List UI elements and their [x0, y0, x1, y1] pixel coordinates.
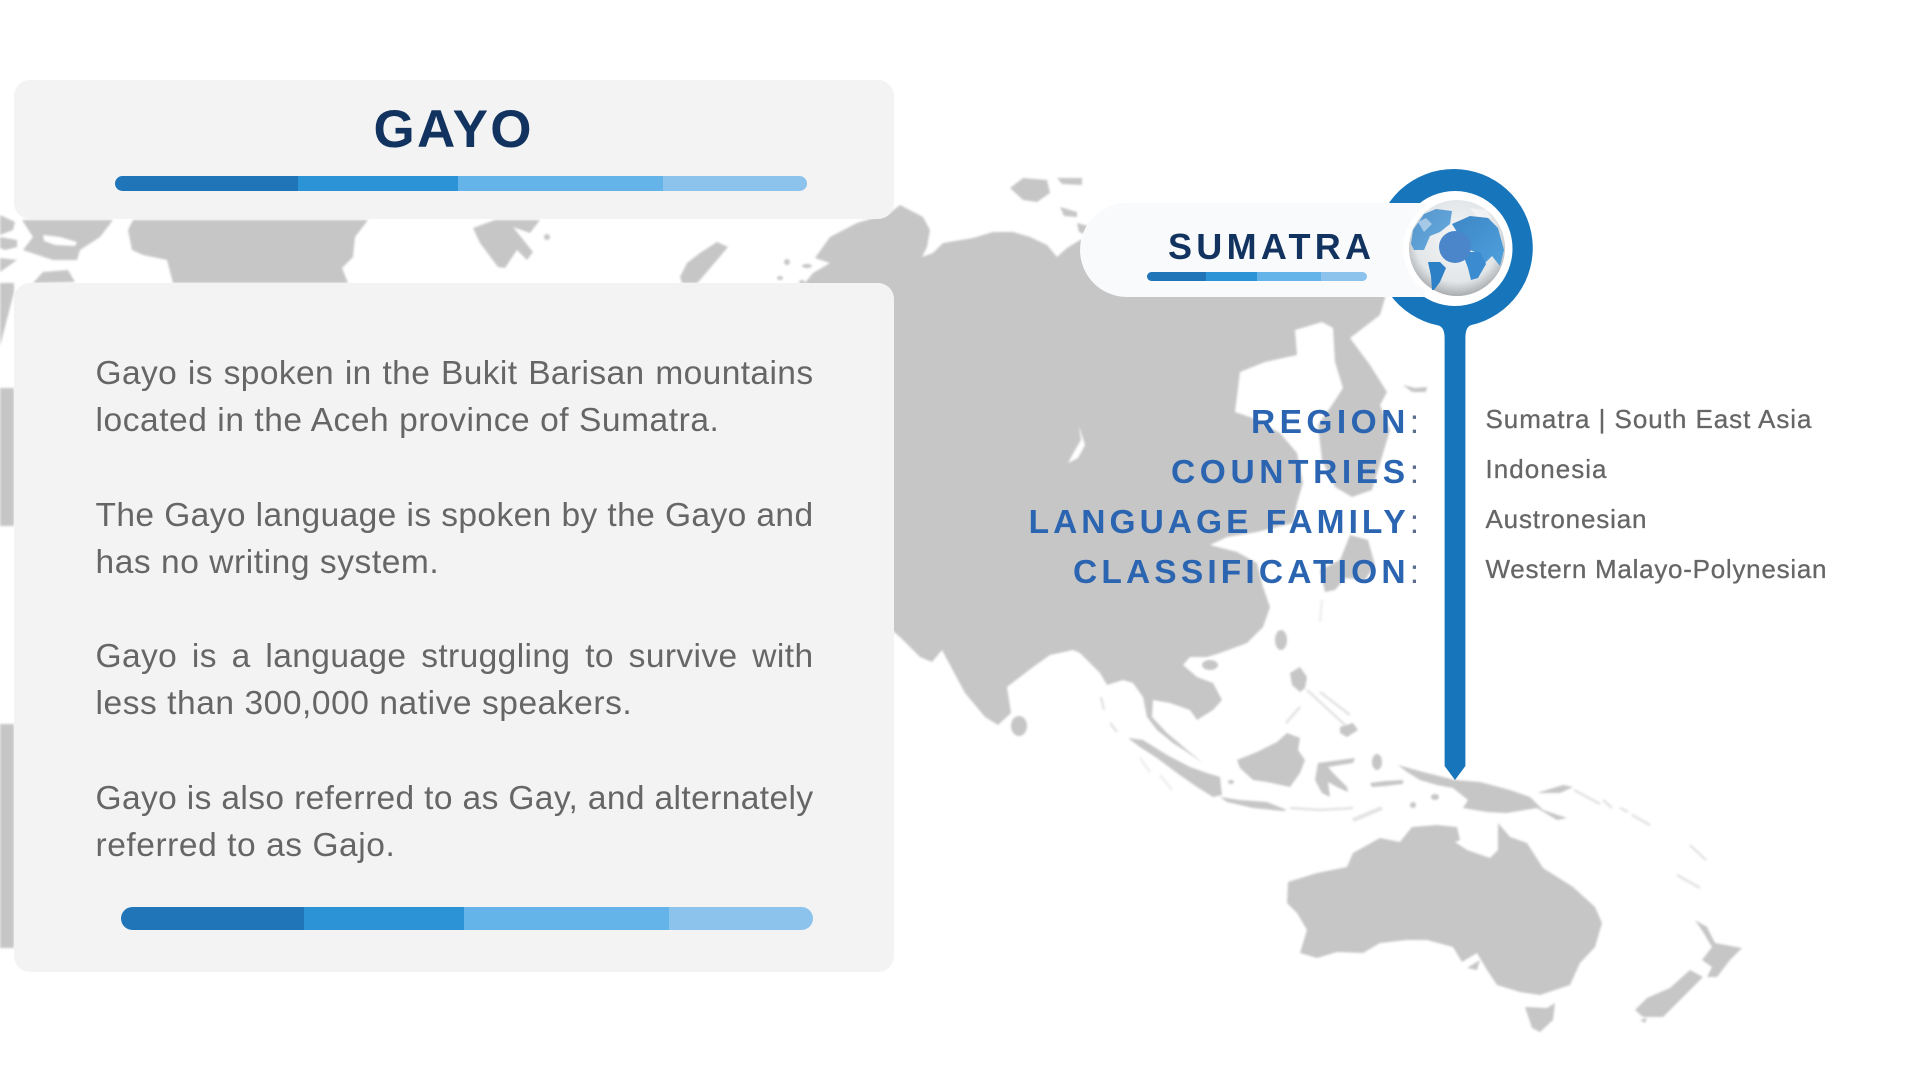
text: Gayo is a language struggling to survive with — [96, 638, 814, 675]
info values — [1486, 404, 1826, 584]
location name: SUMATRA — [1168, 226, 1371, 267]
label: region: REGION: — [1251, 404, 1419, 441]
value: language family: Austronesian — [1486, 504, 1646, 534]
icon: globe — [1409, 200, 1505, 296]
colour bar under title — [115, 176, 807, 191]
text block: paragraph 1 — [96, 355, 814, 439]
text: located in the Aceh province of Sumatra. — [96, 402, 719, 439]
value: countries: Indonesia — [1486, 454, 1607, 484]
colour bar at card foot — [121, 907, 813, 930]
panel: title card — [14, 80, 894, 219]
pin ring and stem — [1375, 169, 1533, 780]
text: referred to as Gajo. — [96, 827, 395, 864]
location pill — [1080, 203, 1425, 297]
map pin — [1080, 169, 1533, 780]
label: classification: CLASSIFICATION: — [1073, 554, 1419, 591]
text: has no writing system. — [96, 544, 439, 581]
value: classification: Western Malayo-Polynesian — [1486, 554, 1826, 584]
text: Gayo is spoken in the Bukit Barisan mountains — [96, 355, 814, 392]
text block: paragraph 4 — [96, 780, 814, 864]
panel: description card — [14, 283, 894, 972]
text block: paragraph 2 — [96, 497, 814, 581]
info labels — [1029, 404, 1419, 591]
heading: GAYO: GAYO — [374, 100, 532, 159]
text: Gayo is also referred to as Gay, and alternately — [96, 780, 814, 817]
label: countries: COUNTRIES: — [1171, 454, 1419, 491]
text: less than 300,000 native speakers. — [96, 685, 632, 722]
pill colour bar — [1147, 272, 1367, 281]
text: The Gayo language is spoken by the Gayo and — [96, 497, 814, 534]
label: language family: LANGUAGE FAMILY: — [1029, 504, 1419, 541]
value: region: Sumatra | South East Asia — [1486, 404, 1812, 434]
text block: paragraph 3 — [96, 638, 814, 722]
